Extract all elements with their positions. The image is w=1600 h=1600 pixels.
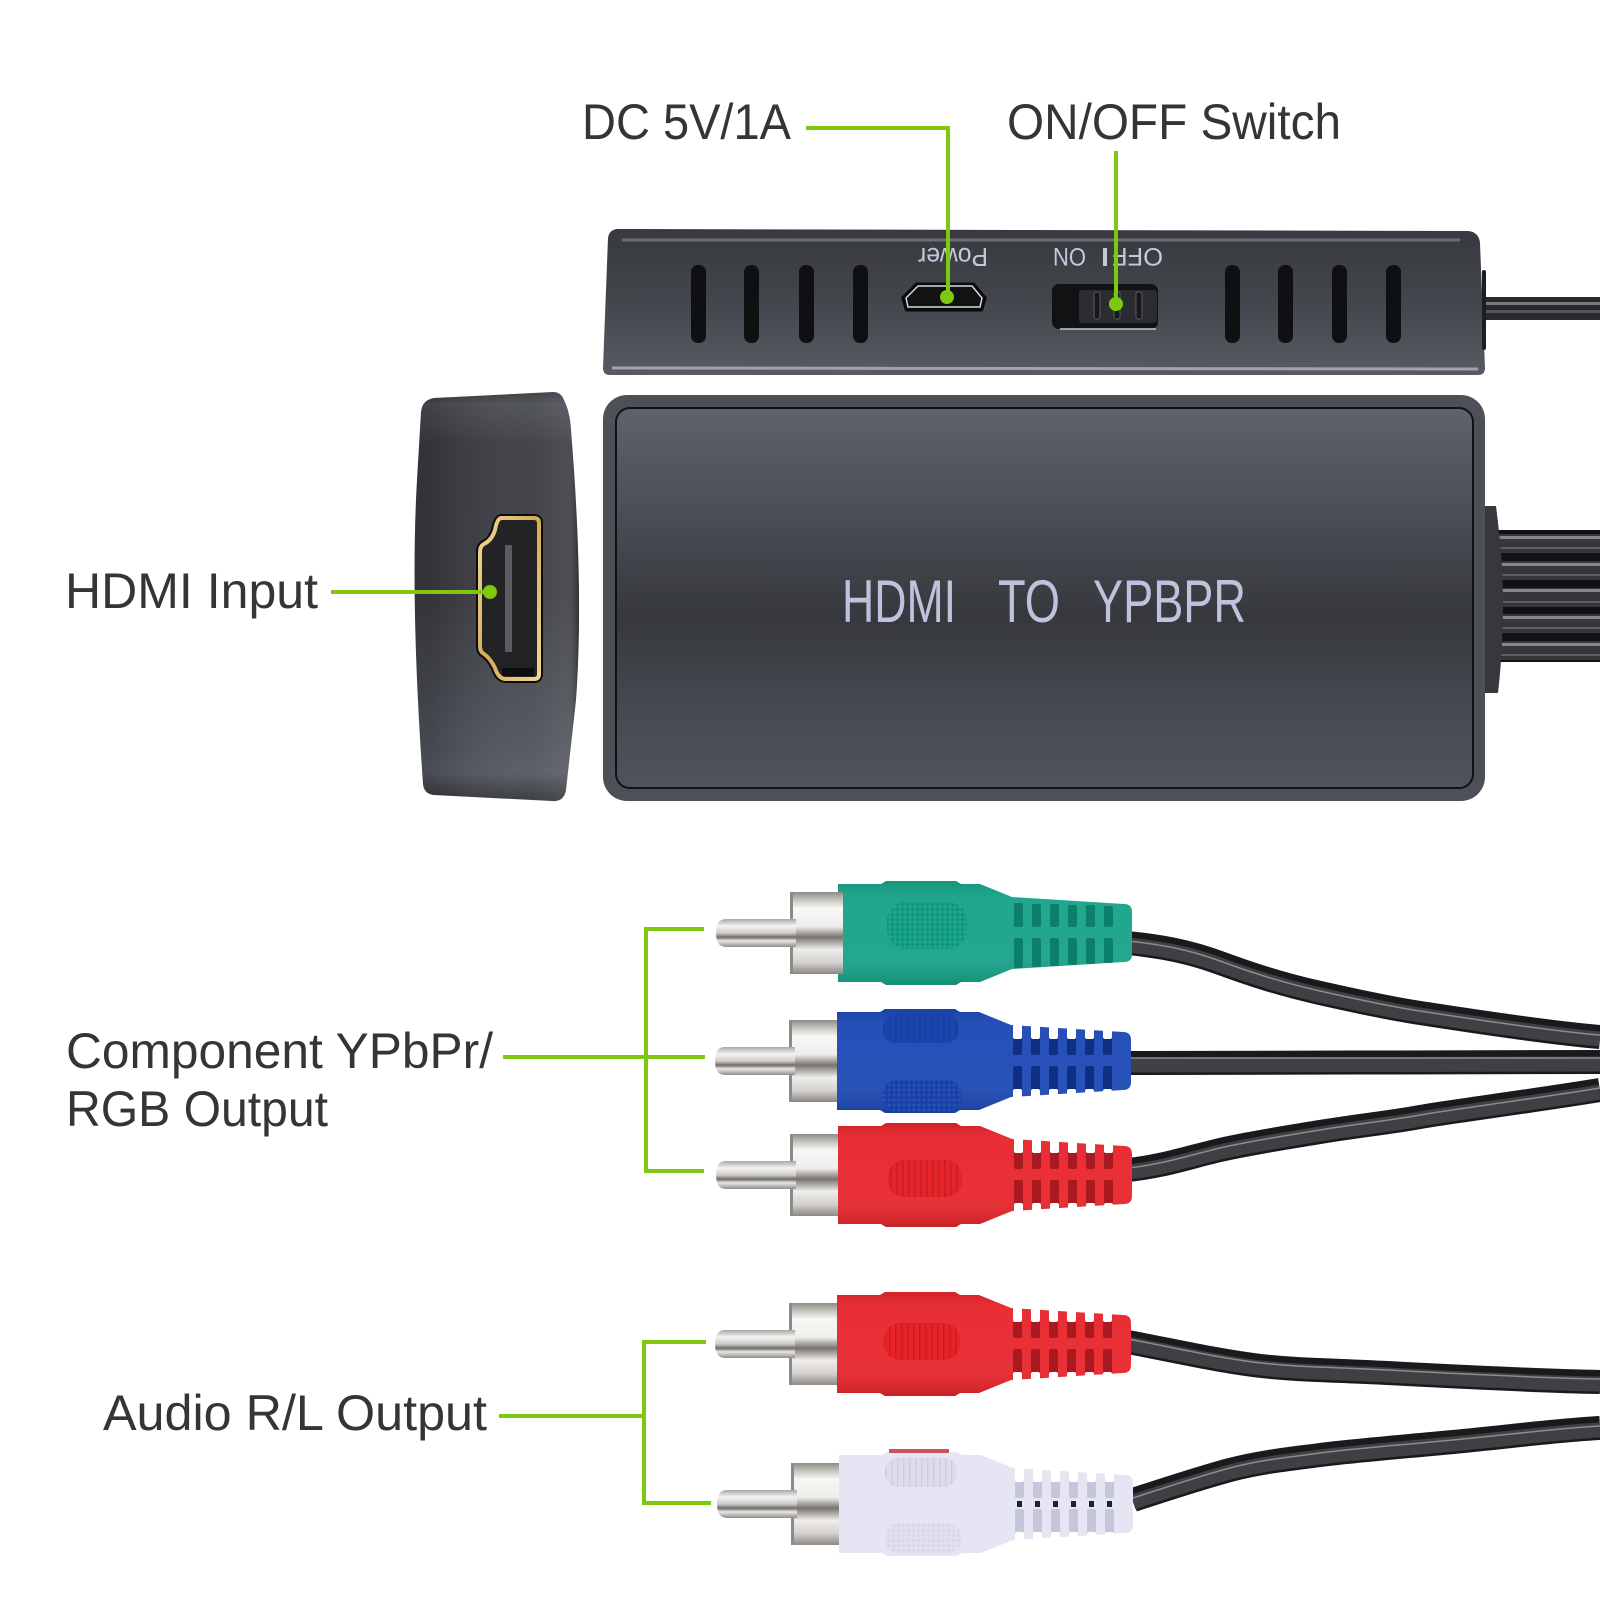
callout: DC 5V/1A bbox=[582, 94, 954, 304]
callout: Audio R/L Output bbox=[103, 1342, 711, 1503]
plug: red audio bbox=[715, 1292, 1131, 1396]
label: OFF I ON (printed upside down): OFF bbox=[1112, 242, 1163, 270]
cables: plug leads bbox=[1128, 941, 1600, 1502]
callout: Component YPbPr/RGB Output: Component YPbPr/ bbox=[66, 1023, 493, 1079]
vents: left group bbox=[691, 265, 868, 343]
plug: green component bbox=[716, 881, 1132, 985]
plug: red component bbox=[716, 1123, 1132, 1227]
cable strain relief block bbox=[1484, 506, 1503, 693]
label: Power (printed upside down): Power bbox=[918, 242, 988, 272]
device: top side panel bbox=[603, 229, 1486, 375]
callout: HDMI Input: HDMI Input bbox=[65, 563, 318, 619]
plug: blue component bbox=[715, 1009, 1131, 1113]
printed title: HDMI TO YPBPR: YPBPR bbox=[1093, 568, 1246, 635]
vents: right group bbox=[1225, 265, 1401, 343]
printed title: HDMI TO YPBPR: HDMI bbox=[842, 568, 956, 635]
cables: output bundle behind main body bbox=[1495, 530, 1600, 662]
callout: HDMI Input bbox=[65, 563, 497, 619]
micro USB port bbox=[904, 285, 984, 309]
label: OFF I ON (printed upside down) bbox=[1053, 242, 1163, 270]
callout: ON/OFF Switch: ON/OFF Switch bbox=[1007, 94, 1341, 150]
callout: ON/OFF Switch bbox=[1007, 94, 1341, 311]
HDMI port bbox=[480, 518, 539, 679]
callout: DC 5V/1A: DC 5V/1A bbox=[582, 94, 792, 150]
printed title: HDMI TO YPBPR bbox=[842, 568, 1246, 635]
device: main body bbox=[603, 395, 1485, 801]
callout: Audio R/L Output: Audio R/L Output bbox=[103, 1385, 487, 1441]
printed title: HDMI TO YPBPR: TO bbox=[998, 568, 1060, 635]
callout: Component YPbPr/RGB Output bbox=[66, 929, 705, 1171]
cable: power lead from top panel bbox=[1482, 297, 1600, 320]
slide switch bbox=[1052, 284, 1158, 329]
label: OFF I ON (printed upside down): ON bbox=[1053, 242, 1086, 270]
device: HDMI end panel bbox=[415, 392, 579, 801]
plug: white audio bbox=[717, 1449, 1133, 1556]
callout: Component YPbPr/RGB Output: RGB Output bbox=[66, 1081, 328, 1137]
